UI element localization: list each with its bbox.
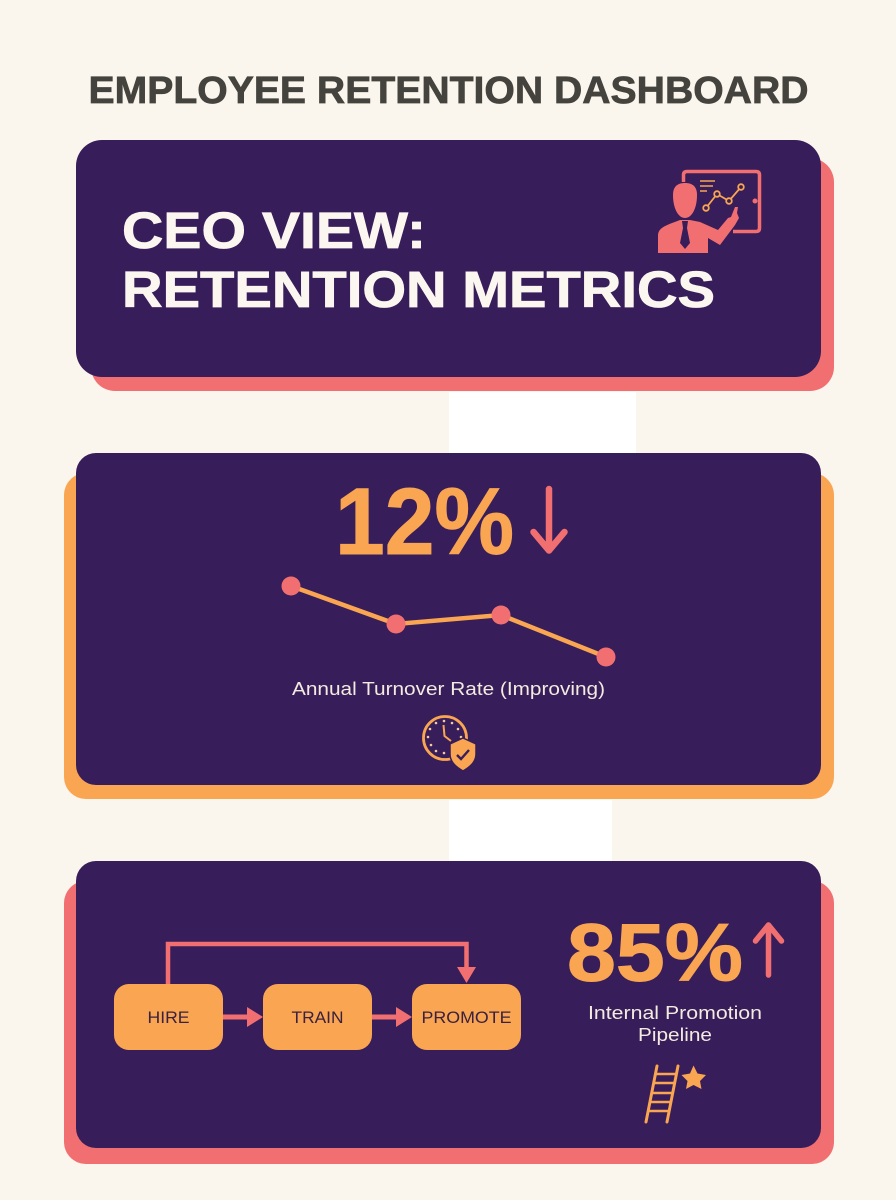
- icon: executive presenting chart on tablet: [658, 172, 760, 253]
- step: promote: [412, 984, 521, 1050]
- title: EMPLOYEE RETENTION DASHBOARD: [88, 70, 808, 112]
- step: train: [263, 984, 372, 1050]
- caption: internal promotion pipeline: Pipeline: [638, 1025, 712, 1045]
- metric: 12 percent: 12%: [335, 469, 514, 575]
- caption: internal promotion pipeline: Internal Promotion: [588, 1003, 762, 1023]
- caption: annual turnover rate: Annual Turnover Rate (Improving): [292, 679, 605, 699]
- icon: ladder and star: [646, 1066, 706, 1122]
- line chart: turnover trend: [282, 576, 616, 666]
- icon: up arrow: [756, 925, 782, 975]
- arrow: hire to promote: [168, 944, 476, 984]
- heading: retention metrics: RETENTION METRICS: [122, 261, 715, 318]
- panel: annual turnover: [64, 453, 834, 799]
- step: promote: PROMOTE: [422, 1008, 512, 1027]
- flow diagram: hire, train, promote: [114, 944, 521, 1050]
- step: hire: HIRE: [148, 1008, 190, 1027]
- step: train: TRAIN: [292, 1008, 344, 1027]
- panel: promotion pipeline: [64, 861, 834, 1164]
- icon: clock with shield: [424, 716, 476, 771]
- caption: internal promotion pipeline: [588, 1003, 762, 1045]
- arrow: hire to train: [223, 1007, 263, 1027]
- arrow: train to promote: [372, 1007, 412, 1027]
- step: hire: [114, 984, 223, 1050]
- panel: CEO view: [76, 140, 834, 391]
- icon: down arrow: [534, 489, 564, 550]
- heading: CEO view: CEO VIEW:: [122, 202, 426, 259]
- metric: 85 percent: 85%: [567, 908, 743, 998]
